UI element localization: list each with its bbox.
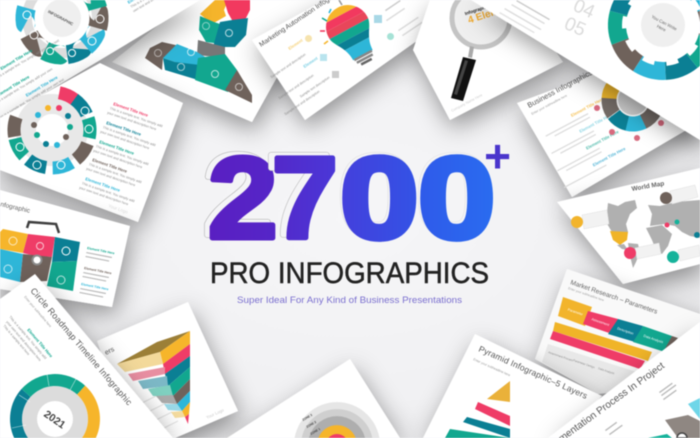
slide title: Circle Roadmap Timeline Infographic — [28, 286, 135, 408]
wheel center text: You Can Write — [651, 14, 678, 32]
digit 7: 7 — [272, 133, 338, 263]
headline number 2700 — [203, 130, 495, 263]
slide: concentric zones — [227, 359, 400, 438]
block labels: Data Analysis — [643, 334, 664, 344]
wheel center text: Here — [656, 24, 667, 33]
slide title fragment: ers — [104, 346, 116, 357]
slide subtitle: Enter your subheadline here — [531, 93, 568, 116]
zone labels: ZONE 2 — [306, 420, 317, 429]
slide: puzzle head — [112, 0, 320, 122]
slide subtitle: Enter your subheadline here — [473, 357, 511, 377]
row labels: Data Analysis — [598, 366, 616, 376]
zone labels: ZONE 3 — [302, 413, 313, 422]
slide: world map — [557, 168, 700, 284]
slide title: Market Research – Parameters — [569, 279, 659, 316]
row guide lines — [138, 394, 178, 432]
left labels: Element — [302, 55, 319, 69]
digit 0: 0 — [338, 132, 417, 261]
parameter blocks — [550, 297, 678, 369]
element titles and text: This is a sample text. You simply add — [81, 181, 135, 203]
briefcase text — [79, 246, 115, 298]
element titles and text: Element Title Here — [99, 139, 135, 156]
year label: 2021 — [41, 408, 68, 432]
element titles and text: Element Title Here — [85, 176, 121, 193]
element titles and text: Element Title Here — [113, 101, 149, 118]
element titles and text: This is a sample text. You simply add — [95, 144, 149, 166]
roadmap donut — [10, 374, 100, 438]
slide: magnifier — [413, 0, 563, 120]
slide: wheel top left — [0, 0, 200, 121]
zone labels: ZONE 1 — [310, 427, 321, 436]
slide subtitle: Enter your subheadline here — [23, 295, 52, 328]
block labels: Assessment — [591, 317, 610, 327]
slide: marketing automation — [252, 0, 442, 120]
slide: presentation process — [550, 325, 700, 438]
element text column: Element Title Here — [0, 48, 34, 71]
slide: business infographic — [517, 50, 700, 197]
briefcase text: Element Title Here — [81, 282, 109, 291]
magnifier — [451, 0, 510, 101]
right labels — [374, 0, 423, 40]
element text block: This is a sample text here — [2, 324, 30, 356]
grey rows — [542, 344, 640, 394]
world land masses — [606, 200, 700, 268]
element titles and text: Element Title Here — [92, 157, 128, 174]
element titles and text — [79, 100, 165, 208]
digit 0: 0 — [416, 132, 493, 261]
element text block: This is a sample text. You simply add — [8, 315, 47, 360]
slide footer: Company Name Here — [451, 93, 483, 113]
element text column: Element Title Here — [25, 74, 59, 98]
element titles and text: This is a sample text. You simply add — [102, 125, 156, 147]
slide: pyramid stack — [97, 302, 238, 438]
slide: circular infographic — [0, 63, 183, 222]
process text — [605, 383, 677, 435]
element text right — [127, 0, 195, 13]
zone labels — [302, 413, 321, 436]
text rows — [535, 96, 632, 188]
slide title: Pyramid Infographic–5 Layers — [477, 344, 589, 401]
magnifier caption: Infographics — [464, 3, 492, 16]
briefcase text: Element Title Here — [87, 246, 115, 255]
block labels — [567, 308, 664, 344]
process shapes — [648, 398, 700, 438]
slide: briefcase — [0, 190, 130, 307]
slide title: Business Infographics — [526, 68, 594, 110]
slide subtitle: Enter your subheadline here — [568, 286, 605, 302]
briefcase handle — [27, 222, 59, 233]
block labels: Parameter — [567, 308, 584, 317]
USA highlight — [610, 231, 628, 245]
left labels: Sample text and description — [278, 73, 315, 100]
map title: World Map — [631, 180, 665, 193]
heading: PRO INFOGRAPHICS — [210, 257, 489, 290]
large step numbers: 05 — [561, 13, 589, 41]
segmented wheel — [10, 0, 114, 70]
digit 7: 7 — [266, 130, 332, 260]
element titles and text: your own text and description here — [93, 149, 143, 169]
digit 7: 7 — [266, 130, 332, 260]
element titles and text: This is a sample text. You simply add — [109, 106, 163, 128]
left labels: Element — [287, 37, 304, 51]
light bulb — [325, 4, 374, 66]
slide: market research — [535, 269, 700, 394]
block labels: Description — [617, 326, 634, 336]
slide: top right wheel — [471, 0, 700, 140]
text rows: Element Title Here — [570, 96, 605, 118]
element titles and text: Element Title Here — [106, 120, 142, 137]
large step numbers — [561, 0, 598, 41]
large wheel — [598, 0, 700, 90]
element titles and text: your own text and description here — [86, 167, 136, 187]
left labels: Sample text description — [299, 75, 331, 99]
slide: pyramid 5 layers — [423, 334, 602, 438]
magnifier caption: 4 Elem — [467, 6, 501, 26]
digit 2: 2 — [203, 130, 273, 260]
digit 0: 0 — [416, 132, 493, 261]
element titles and text: your own text and description here — [100, 130, 150, 150]
element titles and text: your own text and description here — [107, 111, 157, 131]
briefcase text: Element Title Here — [84, 266, 112, 275]
left labels — [270, 35, 339, 116]
callout badges — [571, 192, 700, 263]
subtitle: Super Ideal For Any Kind of Business Presentations — [237, 295, 462, 305]
element text block: your own text and description here — [5, 320, 42, 362]
element titles and text: your own text and description here — [79, 186, 129, 206]
element titles and text: This is a sample text. You simply add — [88, 162, 142, 184]
digit 0: 0 — [338, 132, 417, 261]
plus sign: + — [484, 130, 511, 182]
wheel center label: INFOGRAPHIC — [47, 9, 74, 27]
row labels: Parameter Design — [573, 358, 596, 369]
puzzle person figure — [145, 0, 252, 103]
concentric half circle — [295, 402, 379, 438]
digit 2: 2 — [203, 130, 273, 260]
left labels: Sample text and description — [284, 89, 321, 116]
digit 0: 0 — [340, 134, 419, 263]
wheel center text — [648, 14, 678, 37]
briefcase body — [0, 229, 80, 291]
text rows: Element Title Here — [592, 146, 627, 167]
ring diagram — [0, 76, 106, 184]
row labels: Assessment Process — [548, 350, 574, 363]
gear ring — [594, 67, 666, 141]
digit 0: 0 — [418, 134, 495, 263]
bulb rays — [320, 0, 342, 44]
element text block: Element Title Here — [26, 327, 54, 359]
slide: circle roadmap timeline — [0, 274, 173, 438]
left labels: Sample text and description — [270, 52, 307, 79]
callout cards — [582, 185, 700, 261]
element text column — [0, 33, 79, 121]
3D stacked pyramid — [117, 331, 190, 424]
text rows: Element Title Here — [578, 112, 613, 134]
text rows: Element Title Here — [585, 129, 620, 151]
slide title fragment: nfographic — [0, 201, 31, 215]
footer logo: Your Logo — [108, 203, 129, 215]
footer logo: Your Logo — [205, 407, 225, 420]
row labels — [548, 350, 616, 376]
digit 2: 2 — [208, 133, 278, 263]
step text — [499, 0, 550, 33]
pyramid layers — [445, 381, 510, 438]
